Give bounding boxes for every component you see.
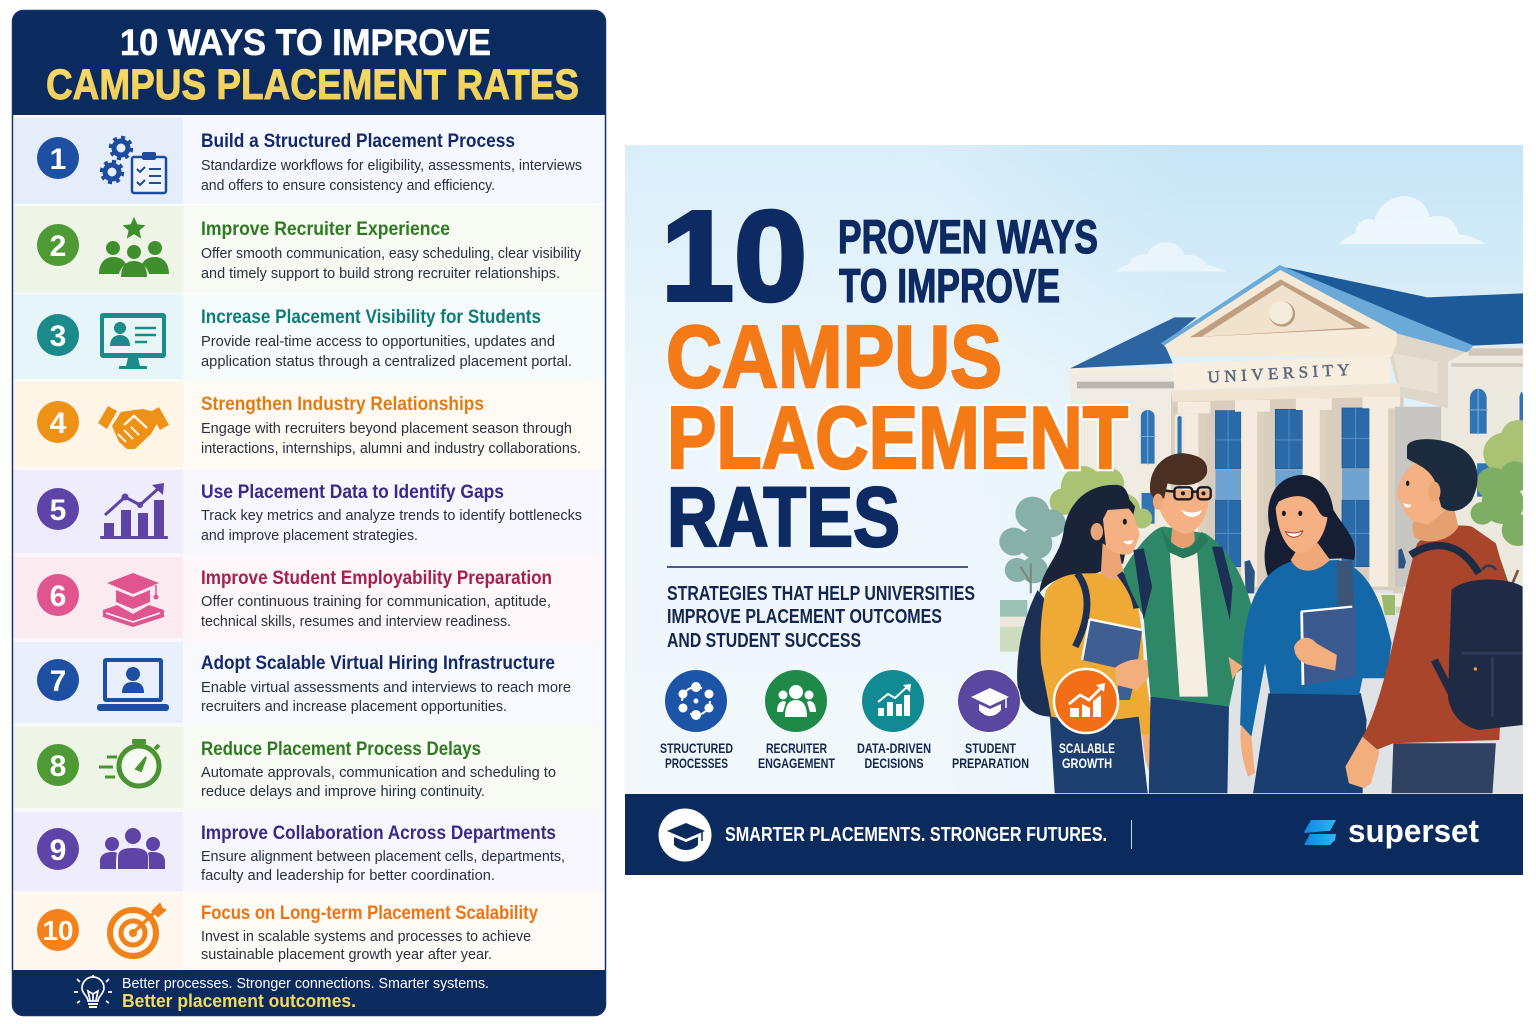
description 8: reduce delays and improve hiring continuity.: [201, 784, 485, 800]
heading: proven ways: PROVEN WAYS: [838, 210, 1098, 263]
description 4: Engage with recruiters beyond placement season through: [201, 421, 572, 437]
icon: lightbulb: [74, 975, 112, 1007]
description 7: recruiters and increase placement opportunities.: [201, 699, 507, 715]
heading: campus: CAMPUS: [666, 307, 1002, 406]
description 1: Standardize workflows for eligibility, assessments, interviews: [201, 158, 582, 174]
subheading: STRATEGIES THAT HELP UNIVERSITIES: [667, 583, 975, 605]
heading 1: Build a Structured Placement Process: [201, 131, 515, 152]
footer line 1: Better processes. Stronger connections. Smarter systems.: [122, 976, 489, 992]
description 9: Ensure alignment between placement cells, departments,: [201, 849, 565, 865]
header banner: [12, 10, 606, 115]
row 9: collaboration: [14, 810, 604, 893]
description 6: [201, 594, 551, 630]
row 8: process delays: [14, 725, 604, 810]
badge 1: 1: [50, 143, 66, 176]
benefit: data-driven decisions: DECISIONS: [864, 755, 924, 771]
badge 10: 10: [42, 915, 74, 946]
heading 3: Increase Placement Visibility for Students: [201, 307, 541, 328]
description 9: faculty and leadership for better coordination.: [201, 868, 495, 884]
heading 10: Focus on Long-term Placement Scalability: [201, 903, 538, 924]
title: first line: 10 WAYS TO IMPROVE: [120, 22, 491, 63]
heading 5: Use Placement Data to Identify Gaps: [201, 482, 504, 503]
footer line 2: Better placement outcomes.: [122, 991, 356, 1011]
description 4: interactions, internships, alumni and industry collaborations.: [201, 441, 581, 457]
row 7: virtual hiring: [14, 641, 604, 725]
ground and trees: [999, 420, 1535, 793]
badge 6: 6: [50, 580, 66, 613]
description 2: and timely support to build strong recruiter relationships.: [201, 266, 560, 282]
benefit: recruiter engagement: ENGAGEMENT: [758, 755, 835, 771]
tagline: SMARTER PLACEMENTS. STRONGER FUTURES.: [725, 824, 1107, 846]
benefit: scalable growth: GROWTH: [1062, 755, 1112, 771]
building: university: [1070, 265, 1525, 618]
description 9: [201, 849, 565, 884]
benefit: student preparation: PREPARATION: [952, 755, 1029, 771]
row 3: placement visibility: [14, 294, 604, 381]
badge 9: [37, 828, 79, 870]
poster footer bar: [625, 794, 1523, 875]
benefit: recruiter engagement: [758, 670, 835, 771]
illustration: students: [1017, 439, 1523, 793]
badge 7: [37, 659, 79, 701]
benefit: structured processes: [660, 670, 733, 771]
heading 9: Improve Collaboration Across Departments: [201, 823, 556, 844]
badge 9: 9: [50, 834, 66, 867]
description 8: Automate approvals, communication and scheduling to: [201, 765, 556, 781]
heading 4: Strengthen Industry Relationships: [201, 394, 484, 415]
benefit: student preparation: [952, 669, 1029, 771]
row 5: placement data: [14, 469, 604, 555]
panel: left checklist infographic: [12, 10, 606, 1016]
heading: 10: 10: [661, 185, 807, 328]
row 4: industry relationships: [14, 381, 604, 469]
benefit: structured processes: PROCESSES: [665, 755, 728, 771]
description 6: Offer continuous training for communication, aptitude,: [201, 594, 551, 610]
panel: right campus poster: [625, 145, 1535, 875]
divider rule: [667, 566, 968, 568]
student: man in green hoodie: [1123, 453, 1254, 793]
badge 3: [37, 314, 79, 356]
title: second line: CAMPUS PLACEMENT RATES: [46, 61, 579, 109]
badge 8: [37, 744, 79, 786]
description 5: [201, 508, 582, 544]
description 4: [201, 421, 581, 457]
badge 2: [37, 224, 79, 266]
description 1: [201, 158, 582, 194]
description 3: [201, 334, 572, 370]
heading: placement: PLACEMENT: [667, 388, 1128, 487]
description 3: Provide real-time access to opportunities, updates and: [201, 334, 555, 350]
badge 1: [37, 137, 79, 179]
logo: superset: superset: [1348, 813, 1479, 849]
row 6: employability: [14, 555, 604, 641]
badge 5: 5: [50, 494, 66, 527]
icon: target and arrow: [110, 903, 166, 956]
badge 4: 4: [50, 407, 67, 440]
heading 2: Improve Recruiter Experience: [201, 219, 450, 240]
badge 2: 2: [50, 230, 66, 263]
subheading: IMPROVE PLACEMENT OUTCOMES: [667, 606, 942, 628]
description 7: Enable virtual assessments and interviews to reach more: [201, 680, 571, 696]
badge 3: 3: [50, 320, 66, 353]
row 2: recruiter experience: [14, 205, 604, 293]
student: man in red jacket with backpack: [1345, 439, 1523, 793]
description 5: Track key metrics and analyze trends to identify bottlenecks: [201, 508, 582, 524]
icon: laptop with person: [97, 658, 169, 711]
benefit: data-driven decisions: DATA-DRIVEN: [857, 740, 931, 756]
row 10: long-term scalability: [14, 892, 604, 970]
icon: monitor with profile: [100, 313, 166, 369]
description 3: application status through a centralized placement portal.: [201, 354, 572, 370]
benefit: student preparation: STUDENT: [965, 740, 1016, 756]
icon: gears and clipboard: [102, 138, 166, 193]
badge 4: [37, 401, 79, 443]
description 1: and offers to ensure consistency and efficiency.: [201, 178, 495, 194]
badge 10: [37, 909, 79, 951]
heading 6: Improve Student Employability Preparation: [201, 568, 552, 589]
footer banner: [12, 970, 606, 1016]
row 1: structured process: [14, 116, 604, 204]
benefit: scalable growth: SCALABLE: [1059, 740, 1115, 756]
icon: graduation cap badge: [658, 808, 712, 862]
sign: university: UNIVERSITY: [1207, 360, 1350, 387]
description 7: [201, 680, 571, 715]
icon: handshake: [98, 406, 169, 449]
subheading: [667, 583, 975, 652]
badge 7: 7: [50, 665, 66, 698]
benefit: recruiter engagement: RECRUITER: [766, 740, 827, 756]
description 10: Invest in scalable systems and processes to achieve: [201, 929, 531, 945]
icon: growth chart: [100, 483, 168, 539]
description 10: sustainable placement growth year after year.: [201, 947, 492, 963]
badge 8: 8: [50, 750, 66, 783]
icon: stopwatch: [99, 739, 159, 786]
icon: graduation cap on book: [103, 573, 164, 627]
student: girl in yellow: [1017, 485, 1158, 793]
description 6: technical skills, resumes and interview readiness.: [201, 614, 511, 630]
benefit: data-driven decisions: [857, 670, 931, 771]
badge 5: [37, 488, 79, 530]
heading: to improve: TO IMPROVE: [839, 259, 1060, 312]
description 8: [201, 765, 556, 800]
heading 7: Adopt Scalable Virtual Hiring Infrastructure: [201, 653, 555, 674]
student: girl in blue: [1240, 475, 1392, 793]
description 10: [201, 929, 531, 963]
benefit: scalable growth: [1054, 669, 1118, 771]
description 2: [201, 246, 582, 282]
badge 6: [37, 574, 79, 616]
description 2: Offer smooth communication, easy scheduling, clear visibility: [201, 246, 582, 262]
icon: three people: [100, 828, 165, 869]
benefit: structured processes: STRUCTURED: [660, 740, 733, 756]
subheading: AND STUDENT SUCCESS: [667, 630, 861, 652]
illustration: campus scene: [999, 196, 1535, 793]
clouds: [1115, 196, 1486, 272]
icon: recruiter group with star: [99, 217, 169, 277]
description 5: and improve placement strategies.: [201, 528, 418, 544]
heading 8: Reduce Placement Process Delays: [201, 739, 481, 760]
heading: rates: RATES: [667, 470, 900, 564]
